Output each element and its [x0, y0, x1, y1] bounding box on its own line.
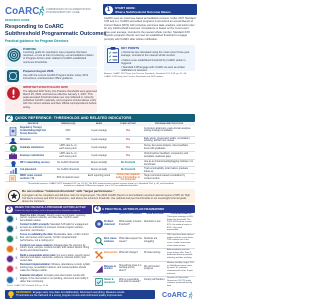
- row: owner and resources: Director of Clinical Ed.; Resources: $1,275 study software, protected faculty time.: [167, 277, 192, 287]
- row: RRBT exam content: [5, 174, 195, 182]
- row: employer satisfaction: [5, 152, 195, 160]
- row: RT credentialing: Yes: [126, 130, 130, 132]
- row: job placement: Job placement: [20, 169, 36, 171]
- row: root cause: Root cause evidence: [104, 238, 117, 243]
- row: employer satisfaction: Employer satisfaction: [20, 155, 44, 157]
- heading bar: section 3: [5, 205, 92, 214]
- heading bar: section 3: 3: [8, 206, 11, 212]
- row: RT credentialing: [5, 126, 195, 137]
- text: step source: Source: CoARC 2027 Standard 3.08, pp. 45–46: [7, 285, 48, 287]
- row: RRT credentialing: No threshold: [121, 162, 135, 164]
- callout: remember bar: [5, 290, 155, 298]
- panel: purpose: [5, 46, 97, 67]
- heading bar: section 4: A PRACTICAL ACTION PLAN FRAMEWORK: [102, 207, 164, 211]
- row: owner and resources: [95, 276, 192, 287]
- text: prepared: Use with the current CoARC Program Action Letter, RCS instructions, and Executive Office guidance.: [23, 74, 88, 80]
- heading: important: IMPORTANT EFFECTIVE-DATE NOTE: [23, 86, 68, 89]
- logo: footer: CoARC: [162, 290, 187, 299]
- logo: CoARC header: CoARC: [5, 6, 39, 17]
- row: root cause: [93, 234, 195, 249]
- row: employer satisfaction: ≥80% rate 3+ on: [59, 153, 77, 155]
- row: RRBT exam content: Each reporting period: [88, 175, 110, 177]
- row: RRBT exam content: 80% of national mean: [57, 177, 79, 179]
- step 2: Contact CoARC promptly: Standard 3.08 calls for engagement as soon as notification is received. Include program number, questions, and timeline.: [20, 223, 88, 232]
- panel: action plan framework: [93, 205, 195, 287]
- row: root cause: What data support the cause?: [119, 238, 142, 243]
- text: remember: [16, 291, 125, 297]
- row: graduate satisfaction: ≥80% rate 3+ on: [59, 145, 77, 147]
- row: intervention: [93, 249, 195, 262]
- row: root cause: Students are struggling: [144, 238, 157, 243]
- row: retention: Early alerts, progression audits, remediation, advising, attrition root causes: [144, 138, 190, 142]
- heading: start here: [115, 6, 171, 14]
- row: owner and resources: Owner & resources: [104, 279, 115, 284]
- row: retention: Yes: [126, 139, 130, 141]
- row: job placement: No CoARC threshold: [57, 169, 79, 171]
- row: RRT credentialing: RRT credentialing success: [20, 162, 50, 164]
- heading bar: quick reference: QUICK REFERENCE: THRESHOLDS AND RELATED INDICATORS: [15, 116, 131, 120]
- heading: prepared: Prepared August 2026: [23, 69, 53, 73]
- icon: calendar: [7, 70, 19, 82]
- logo: CoARC header: COMMISSION ON ACCREDITATION: [46, 8, 91, 11]
- row: retention: [5, 137, 195, 144]
- step 1: 1: [16, 216, 17, 220]
- panel: when you receive a program action letter: [5, 205, 92, 284]
- step 2: 2: [16, 226, 17, 230]
- text: important: The adjusted 2027 Entry Into Practice thresholds were approved March 25, 2026, and become effective January 1, 2027. This peak-accepted threshold values are only reflected in currently published CoARC materials, and programs should always verify with the current website and their official correspondence before acting.: [23, 90, 97, 109]
- step 1: Read the letter closely: Identify exact benchmarks, reporting period, required evidence, and due date. Confirm exact accreditation status.: [20, 214, 85, 222]
- step 3: 3: [16, 236, 17, 240]
- row: job placement: Report annually: [91, 169, 107, 171]
- logo: CoARC header: FOR RESPIRATORY CARE: [46, 11, 80, 14]
- text: remember: REMEMBER: Engage early. Use data. Act deliberately. Document everything. Measure results.: [16, 291, 125, 294]
- text: remember: Thresholds are the hallmark of a strong program review and continuous quality improvement.: [16, 294, 123, 297]
- row: RT credentialing: Regulatory Therapy Credentialing (High Cut Score) Success: [20, 127, 46, 135]
- step 4: 4: [16, 247, 17, 251]
- icon: clipboard: [107, 47, 119, 63]
- step 7: Evaluate and adjust: Compare post-intervention results with targets. If the intervention is not working, document and modify it rather than continuing.: [20, 274, 88, 283]
- row: intervention: What will change?: [119, 252, 138, 254]
- row: retention: 3-year average: [91, 139, 107, 141]
- icon: target: [7, 48, 21, 62]
- row: job placement: No threshold: [121, 169, 135, 171]
- icon: number 1: [104, 6, 112, 14]
- heading: start here: What a Subthreshold Outcome Means: [115, 10, 171, 14]
- row: measure and monitor: [93, 262, 195, 277]
- row: graduate satisfaction: each survey item: [59, 148, 77, 150]
- heading bar: section 4: [93, 205, 195, 212]
- row: measure and monitor: Measure & monitor: [104, 266, 116, 270]
- table header: COARC ACTION?: [120, 123, 136, 125]
- table header: STRONGER EXAMPLE: [171, 213, 191, 215]
- panel: important note: [5, 85, 97, 113]
- row: intervention: Add mandatory practice exam review after Term 2; dedicated learning module; advising includes tracking.: [167, 249, 193, 259]
- row: graduate satisfaction: Yes: [126, 147, 130, 149]
- table header: WEAK RESPONSE: [146, 213, 164, 215]
- row: employer satisfaction: Clinical partner feedback, competency and workplace readiness gaps: [144, 153, 188, 158]
- row: RRT credentialing: [5, 160, 195, 167]
- table header: [5, 122, 195, 126]
- row: problem statement: Retention is low: [144, 221, 160, 223]
- row: intervention: Provide tutoring: [144, 252, 160, 254]
- title block: RESOURCE GUIDE: [5, 18, 30, 22]
- table header: INDICATOR: [28, 123, 38, 125]
- row: RT credentialing: Curriculum alignment, exam-domain analysis, testing strategy remediation: [144, 128, 191, 132]
- row: RRBT exam content: RRBT exam content sections / TE: [20, 175, 42, 180]
- row: owner and resources: Faculty will handle it: [144, 278, 165, 280]
- table header: BASIS: [96, 123, 102, 125]
- row: problem statement: Three-year average is 64%, below the threshold. The 2023–2024 cohort scored 62%; the national mean is 85%. Clear and measurable.: [167, 216, 193, 231]
- row: measure and monitor: We will monitor progress: [144, 266, 160, 270]
- heading: purpose: PURPOSE: [23, 48, 36, 50]
- step 7: 7: [16, 277, 17, 281]
- row: RT credentialing: 3-year average: [91, 130, 107, 132]
- row: graduate satisfaction: Survey item-level analysis, close-feedback focus with graduates: [144, 145, 188, 150]
- row: measure and monitor: Monitor monthly; target 75% on Self-Assessment exam by week 10; retention reviewed each term; 3-year outcome.: [167, 262, 194, 275]
- step 6: Document implementation: Minutes, attendance records, syllabi, training logs, remediation trackers, and revised policies should make the changes visible.: [20, 263, 90, 272]
- row: RRT credentialing: Report annually: [91, 162, 107, 164]
- title block: Subthreshold Programmatic Outcomes: [5, 31, 106, 37]
- table header: QUESTION TO ANSWER: [119, 213, 142, 215]
- heading: start here: START HERE:: [115, 6, 136, 10]
- row: RRT credentialing: No CoARC threshold: [57, 162, 79, 164]
- step 3: Focus on validating the data: Recalculate rates, confirm cohort lists, and review exam reports. Confirm programmatic performance, not a coding error.: [20, 233, 89, 242]
- row: owner and resources: Who is responsible and what is needed?: [119, 278, 140, 283]
- row: employer satisfaction: 3-year average: [91, 155, 107, 157]
- panel: start here header: [103, 4, 197, 15]
- table header: THRESHOLD(S): [61, 123, 75, 125]
- step 5: Build a measurable action plan: For every action, specify owner, start and end dates, resources, evidence, success metric, and review date.: [20, 254, 90, 262]
- step 4: Conduct root-cause analysis: Disaggregate the outcome by cohort, track, campus, content domain, and student factors. Bring faculty and clinical leaders.: [20, 244, 89, 252]
- row: graduate satisfaction: 3-year average: [91, 147, 107, 149]
- heading bar: section 3: Follow the steps in order; each is documented as formative evidence.: [15, 210, 81, 212]
- heading: callout: Do not confuse “minimum threshold” with “target performance.”: [22, 189, 114, 193]
- panel: key points: [104, 45, 195, 71]
- row: problem statement: What exactly is below threshold?: [119, 221, 141, 226]
- row: intervention: Intervention: [104, 252, 117, 254]
- row: employer satisfaction: Yes: [126, 155, 130, 157]
- list: key points: • Standard 3.08 Engage with CoARC as soon as written notification is received.: [121, 66, 185, 72]
- title block: Practical guidance for Program Directors: [5, 38, 68, 42]
- heading bar: section 4: 4: [96, 206, 99, 212]
- step 6: 6: [16, 266, 17, 270]
- row: graduate satisfaction: [5, 144, 195, 152]
- row: root cause: TMC item-level data show a pattern with the same items; CSE content has a low score; student interviews show mixed review.: [167, 234, 194, 247]
- row: problem statement: [93, 216, 195, 234]
- step 5: 5: [16, 256, 17, 260]
- text: threshold sources note: Threshold sources: CoARC 2027 Standard 3.07, pp. 41–42; The 80% national mean content section shown is in Standard 3.04, p. 40, and should be treated as a required COA action support, not a 3.07 accreditation threshold.: [28, 182, 174, 187]
- list: key points: • Failure at an established threshold by CoARC action is triggered.: [121, 59, 186, 65]
- heading: key points: KEY POINTS: [121, 46, 139, 50]
- row: retention: Retention: [20, 139, 31, 141]
- panel: prepared: [5, 68, 97, 83]
- table header: PROGRAM DIRECTOR FOCUS: [155, 123, 183, 125]
- row: employer satisfaction: each survey item: [59, 156, 77, 158]
- table header: [100, 212, 192, 215]
- title block: [5, 18, 106, 43]
- list: key points: • Outcomes are calculated using the most recent three-year average, rounded to the nearest whole number.: [121, 51, 189, 57]
- icon: number 1: 1: [107, 6, 110, 12]
- heading bar: section 3: WHEN YOU RECEIVE A PROGRAM ACTION LETTER: [15, 205, 86, 209]
- panel: minimum threshold callout: [5, 189, 195, 203]
- row: RT credentialing: 60%: [66, 130, 70, 132]
- icon: alert: [7, 87, 20, 100]
- table header: ELEMENT: [100, 213, 110, 215]
- logo: CoARC header: [5, 6, 91, 17]
- row: problem statement: Problem statement: [104, 221, 115, 226]
- text: source: Source: CoARC 2027 Entry Into Practice Standards; Standard 3.07–3.08, pp. 41–46; CoARC 2026 Entry Into Practice Standards and 2026 update.: [104, 73, 187, 78]
- row: job placement: Track employability, local market, graduate follow-up: [144, 168, 188, 173]
- row: measure and monitor: How will we know it is working and by when?: [119, 264, 141, 272]
- row: RRT credentialing: Use as an internal leading/lagging indicator, not benchmark: [144, 161, 193, 166]
- panel: quick reference: [5, 114, 195, 182]
- icon: star: [8, 190, 20, 202]
- list: key points: [121, 51, 190, 72]
- row: RRBT exam content: Target curriculum-based remediation by content section: [144, 175, 185, 180]
- heading bar: quick reference: 2: [8, 114, 11, 120]
- row: graduate satisfaction: Graduate satisfaction: [20, 147, 44, 149]
- icon: lightbulb: [8, 291, 14, 298]
- text: start here paragraph: CoARC uses an outcomes-based accreditation process. Under 2027 Standard 3.05 and 4.1, CoARC-accredited programs must submit an annual Report of Current Status (RCS) with complete outcomes data, analysis, and action plan for any subthreshold outcomes. Compliance is based on the most recent three-year average, rounded to the nearest whole number. Standard 3.08 requires programs that do not meet an established threshold to engage promptly with CoARC after written notification.: [104, 17, 196, 41]
- text: callout: A program can be compliant and still have room for improvement. The 2026 CoARC Report on Accreditation reported national means of 96% for High Cut Score success and 92% for retention—well above the minimum threshold. Use national and peer benchmarks to set meaningful internal goals above the minimum.: [22, 194, 190, 203]
- row: RRBT exam content: Action plan required under 3.04 whether or not threshold: [116, 174, 140, 181]
- text: purpose: A working guide for respiratory care programs that have received—or are at risk of receiving—an accreditation citation or Program Action Letter related to CoARC-established outcomes thresholds.: [23, 51, 94, 64]
- heading bar: quick reference: [5, 114, 195, 122]
- row: retention: 70%: [66, 139, 70, 141]
- row: job placement: [5, 167, 195, 174]
- title block: Responding to CoARC: [5, 24, 64, 30]
